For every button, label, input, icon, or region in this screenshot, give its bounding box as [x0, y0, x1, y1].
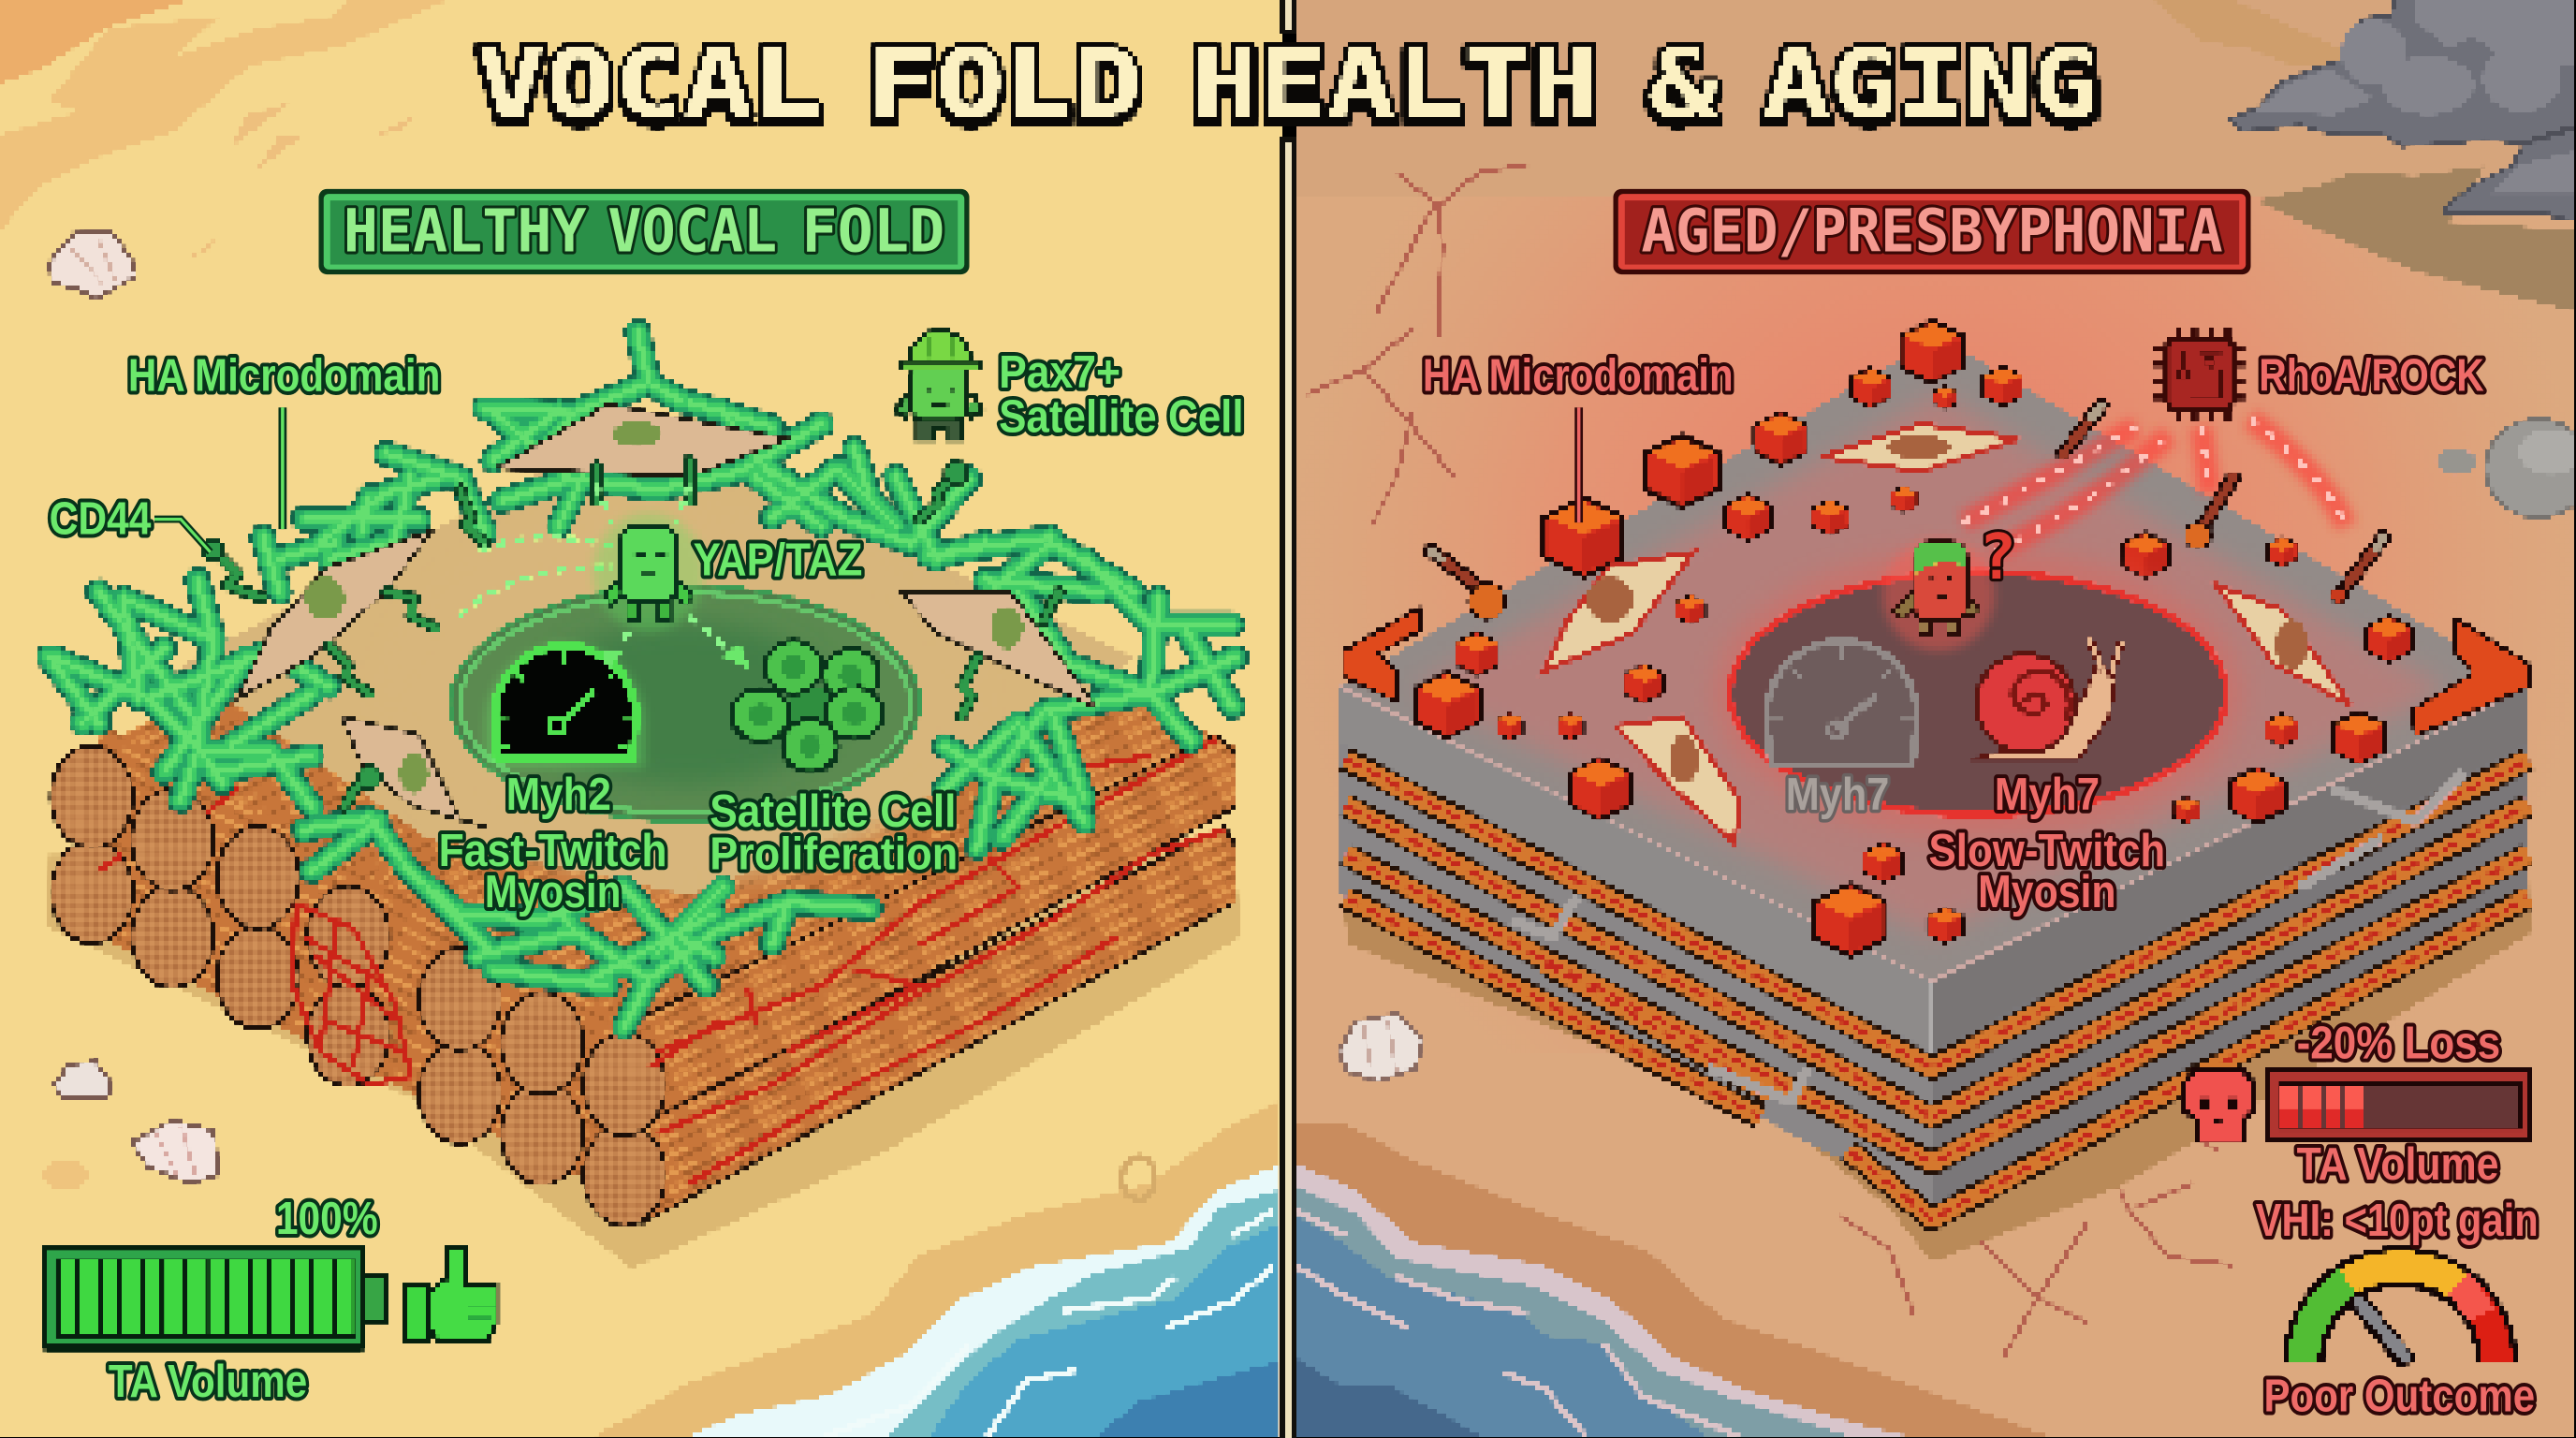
banner: healthy vocal fold: HEALTHY [344, 197, 587, 266]
title: FOLD [868, 30, 1142, 140]
icon: footprint shell trace [1122, 1157, 1155, 1199]
callout: HA microdomain aged: HA Microdomain [1423, 351, 1734, 402]
banner: healthy vocal fold: FOLD [801, 197, 944, 266]
icon: thumbs up [404, 1249, 496, 1343]
title: AGING [1763, 30, 2100, 140]
CD44 receptors [204, 460, 1060, 807]
layered fibers [1345, 759, 2528, 1219]
icon: storm clouds [2230, 0, 2576, 220]
signalling ellipse [450, 585, 920, 822]
callout: CD44 [50, 493, 211, 552]
slab top [1340, 337, 2528, 981]
label: Pax7 satellite cell: Satellite Cell [999, 392, 1244, 443]
label: Myh7 slow-twitch myosin [1928, 770, 2165, 917]
icon: RhoA chip [2154, 327, 2244, 420]
red damage lines [98, 748, 411, 1084]
label: satellite cell proliferation: Satellite Cell [710, 786, 956, 837]
ground shadow [1344, 822, 2530, 1262]
title: & [1647, 30, 1718, 140]
label: RhoA/ROCK: RhoA/ROCK [2259, 351, 2484, 402]
slab body [1340, 687, 1932, 1208]
label: Myh2 fast-twitch myosin: Myh2 [506, 770, 611, 820]
panel: healthy vocal fold platform [48, 231, 1240, 1269]
banner: healthy vocal fold: VOCAL [607, 197, 777, 266]
label: Myh2 fast-twitch myosin [439, 770, 667, 917]
signalling ellipse [1715, 549, 2241, 838]
log stack [51, 444, 1236, 1225]
damaged fibroblasts [1543, 424, 2351, 843]
degraded HA fragments [1414, 320, 2411, 956]
ground shadow [48, 855, 1240, 1269]
icon: confused YAP/TAZ character [1882, 539, 1995, 651]
title: VOCAL [476, 30, 822, 140]
label: satellite cell proliferation [710, 786, 958, 879]
icon: outcome gauge [2304, 1266, 2497, 1364]
widgets drawn on top [43, 1068, 2533, 1364]
title [476, 30, 2100, 140]
tissue surface [181, 419, 1134, 896]
label: faded Myh7: Myh7 [1786, 770, 1889, 820]
panel: aged sand background [1295, 0, 2576, 1438]
icon: Pax7 satellite cell with helmet [896, 330, 983, 440]
icon: battery healthy [43, 1245, 386, 1351]
chevrons at slab corners [1344, 608, 2528, 736]
panel: healthy sand background [0, 0, 1281, 1438]
label: Pax7 satellite cell [999, 347, 1244, 443]
icon: health bar aged [2265, 1068, 2533, 1142]
label: TA volume healthy: TA Volume [109, 1357, 307, 1407]
icon: skull [2185, 1068, 2252, 1142]
panel: aged vocal fold platform [1339, 320, 2530, 1262]
callout: HA microdomain healthy: HA Microdomain [128, 351, 440, 402]
callout: CD44: CD44 [50, 493, 152, 544]
icon: snail [1971, 640, 2121, 759]
label: Myh2 fast-twitch myosin: Fast-Twitch [439, 826, 667, 876]
label: TA volume aged: TA Volume [2297, 1139, 2499, 1190]
icon: faded speedometer [1766, 640, 1917, 766]
label: poor outcome: Poor Outcome [2264, 1372, 2535, 1422]
title: HEALTH [1191, 30, 1599, 140]
label: 20 percent loss: -20% Loss [2297, 1018, 2500, 1068]
icon: speedometer [494, 646, 636, 759]
label: Myh2 fast-twitch myosin: Myosin [485, 867, 621, 917]
label: Pax7 satellite cell: Pax7+ [999, 347, 1120, 398]
arrows: YAP/TAZ signals [460, 485, 751, 670]
icon: shell [1339, 1014, 1423, 1081]
divider [1280, 0, 1296, 1438]
icon: question mark: ? [1979, 521, 2016, 594]
label: Myh7 slow-twitch myosin: Myh7 [1995, 770, 2100, 820]
banner: aged presbyphonia: AGED/PRESBYPHONIA [1641, 197, 2223, 266]
label: 100 percent: 100% [276, 1194, 378, 1244]
icon: proliferating cells [731, 640, 882, 772]
hyaluronic coral network [50, 332, 1236, 1027]
red glow from signal [1963, 419, 2346, 550]
icon: rocks [2437, 419, 2576, 518]
label: YAP/TAZ: YAP/TAZ [694, 535, 862, 585]
fibroblast cells [238, 404, 1097, 829]
icon: shells [50, 231, 218, 1183]
icon: YAP/TAZ character [593, 513, 705, 631]
broken receptors [1431, 406, 2384, 620]
label: Myh7 slow-twitch myosin: Myosin [1978, 867, 2116, 917]
banner: healthy vocal fold [318, 189, 970, 274]
label: satellite cell proliferation: Proliferation [710, 829, 958, 879]
label: Myh7 slow-twitch myosin: Slow-Twitch [1928, 826, 2165, 876]
